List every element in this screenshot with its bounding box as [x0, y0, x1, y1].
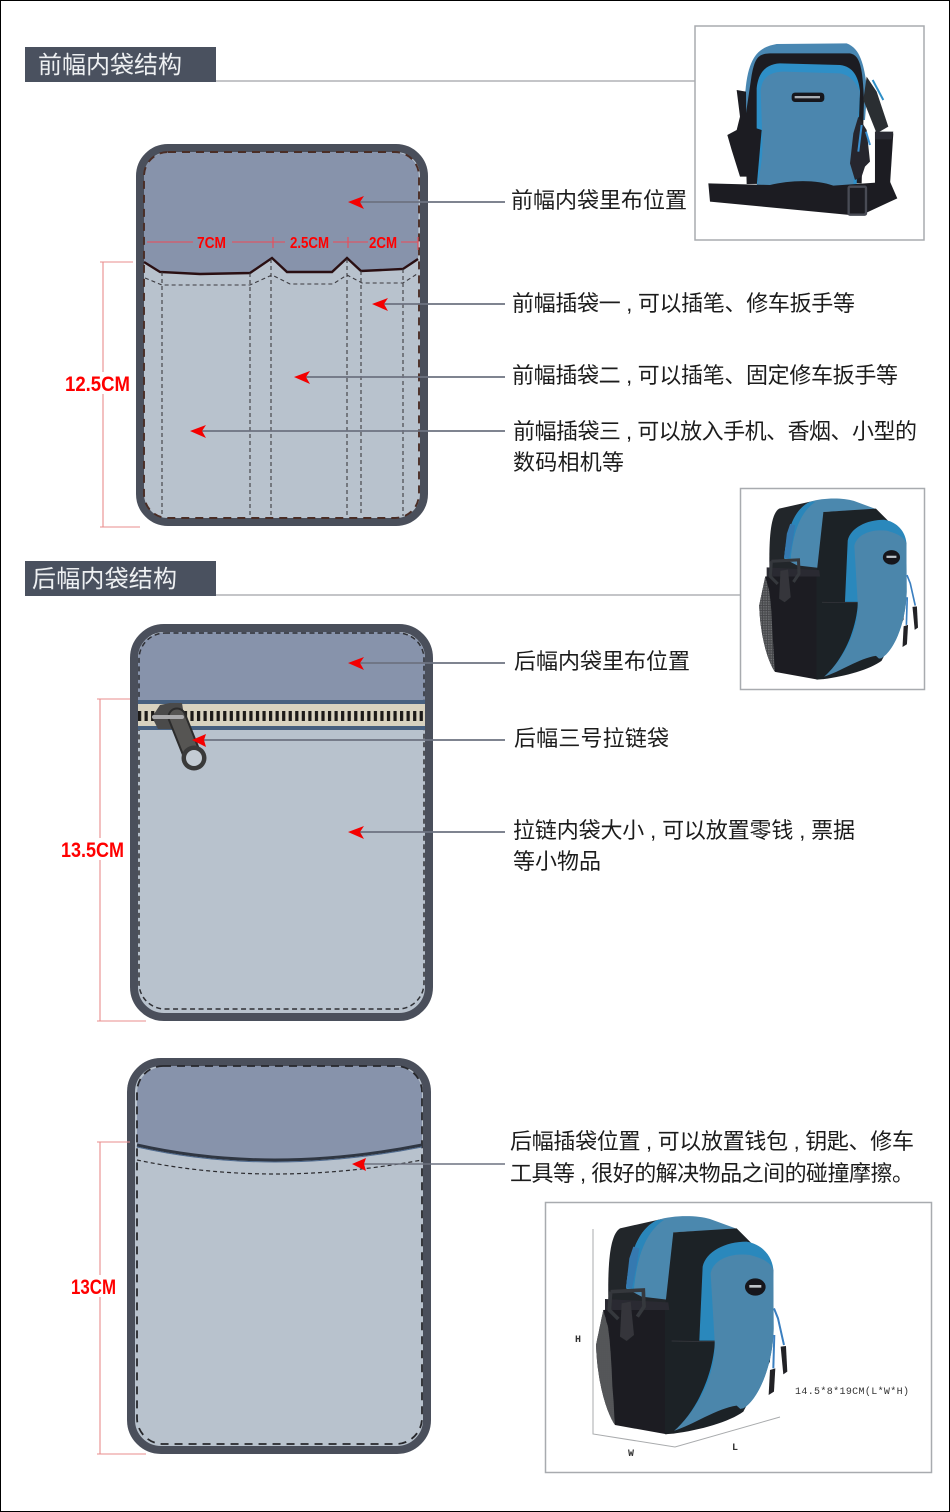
- photo: front view of bag: [695, 26, 924, 240]
- label: zipper pocket size: 拉链内袋大小 , 可以放置零钱 , 票据: [513, 818, 855, 843]
- label: front pocket one: 前幅插袋一 , 可以插笔、修车扳手等: [512, 291, 855, 316]
- pocket stitching: [145, 259, 417, 516]
- height dimension: 13CM: [71, 1142, 146, 1454]
- arrow: front pocket three: [190, 425, 505, 438]
- heading: front inner pocket structure: [25, 47, 216, 82]
- label: front lining: 前幅内袋里布位置: [511, 188, 687, 213]
- panel: back zipper pocket diagram: [134, 628, 429, 1017]
- label: zipper pocket size: 等小物品: [513, 849, 601, 874]
- size text: 14.5*8*19CM(L*W*H): [795, 1386, 909, 1398]
- front lining area: [144, 152, 419, 274]
- arrow: slip pocket: [352, 1158, 505, 1171]
- panel: front pocket diagram: [140, 148, 424, 522]
- width dimension line: [147, 235, 418, 252]
- zipper puller: [152, 703, 206, 770]
- arrow: front pocket one: [372, 298, 505, 311]
- height dimension: 12.5CM: [65, 262, 140, 527]
- photo: side view of bag: [740, 488, 924, 690]
- height dimension: 12.5CM: 12.5CM: [65, 373, 130, 396]
- arrow: back lining: [348, 657, 505, 670]
- dimension axes: [593, 1229, 780, 1447]
- axis label W: W: [628, 1449, 634, 1460]
- axis label H: H: [575, 1335, 581, 1346]
- width dimension line: 2.5CM: [290, 235, 329, 252]
- label: front pocket three: 前幅插袋三 , 可以放入手机、香烟、小型的: [513, 419, 917, 444]
- label: back lining: 后幅内袋里布位置: [514, 649, 690, 674]
- pocket opening seam: [144, 258, 418, 274]
- label: slip pocket: [510, 1129, 914, 1186]
- arrow: zipper pocket size: [348, 826, 505, 839]
- zipper: [138, 700, 425, 770]
- heading: back inner pocket structure: [25, 561, 216, 596]
- width dimension line: 2CM: [369, 235, 397, 252]
- arrow: zipper pocket: [192, 734, 505, 747]
- slip pocket lining area: [137, 1066, 422, 1160]
- label: front pocket three: [513, 419, 917, 475]
- label: slip pocket: 工具等 , 很好的解决物品之间的碰撞摩擦。: [510, 1161, 914, 1186]
- height dimension: 13CM: 13CM: [71, 1276, 116, 1299]
- height dimension: 13.5CM: [61, 699, 146, 1021]
- back lining area: [138, 632, 425, 700]
- width dimension line: 7CM: [197, 235, 226, 252]
- label: front pocket three: 数码相机等: [513, 450, 624, 475]
- label: zipper pocket: 后幅三号拉链袋: [514, 726, 669, 751]
- arrow: front pocket two: [294, 371, 505, 384]
- photo: bag with dimensions: [546, 1202, 932, 1472]
- label: slip pocket: 后幅插袋位置 , 可以放置钱包 , 钥匙、修车: [510, 1129, 914, 1154]
- label: zipper pocket size: [513, 818, 855, 874]
- panel: back slip pocket diagram: [131, 1062, 427, 1450]
- heading: back inner pocket structure: 后幅内袋结构: [32, 566, 177, 593]
- height dimension: 13.5CM: 13.5CM: [61, 839, 124, 862]
- axis label L: L: [732, 1443, 738, 1454]
- heading: front inner pocket structure: 前幅内袋结构: [38, 52, 182, 79]
- arrow: front lining: [348, 196, 505, 209]
- pocket stitching: [137, 1160, 422, 1174]
- pocket opening seam: [137, 1145, 422, 1160]
- label: front pocket two: 前幅插袋二 , 可以插笔、固定修车扳手等: [512, 363, 898, 388]
